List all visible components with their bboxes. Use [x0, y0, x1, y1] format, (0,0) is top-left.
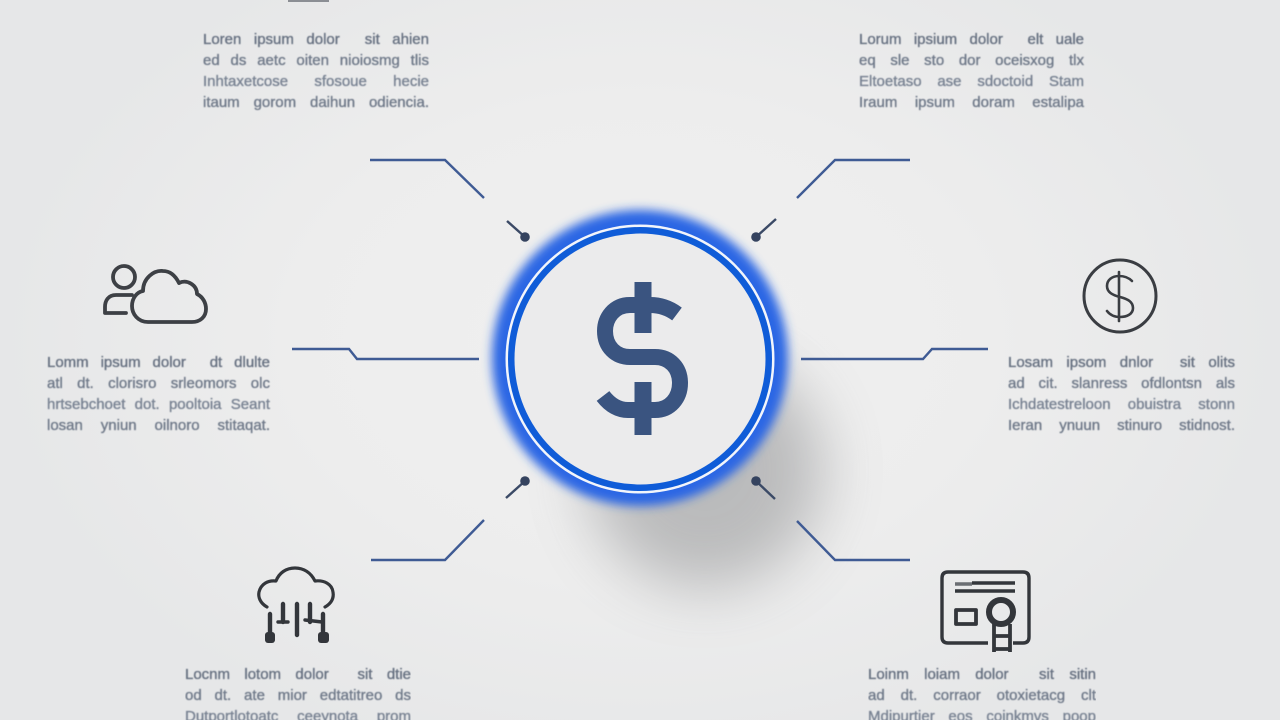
blue glow	[492, 210, 788, 506]
text block: top right: Lorum ipsium dolor elt uale	[859, 31, 1084, 48]
text block: right	[1008, 354, 1236, 434]
connector: left	[292, 349, 479, 359]
icon: cloud with connectors	[257, 566, 335, 643]
text block: right: Ieran ynuun stinuro stidnost.	[1008, 417, 1235, 434]
text block: top left: ed ds aetc oiten nioiosmg tlis	[203, 52, 429, 69]
text block: bottom left: Locnm lotom dolor sit dtie	[185, 666, 411, 683]
icon: dollar coin	[1082, 258, 1158, 334]
text block: top left: itaum gorom daihun odiencia.	[203, 94, 429, 111]
connector: top left	[370, 160, 530, 242]
panel: bottom right, certificate	[868, 570, 1096, 720]
text block: top left	[202, 31, 430, 111]
panel: top right text	[858, 31, 1085, 111]
text block: bottom left: od dt. ate mior edtatitreo ds	[185, 687, 411, 704]
connector: bottom left	[371, 476, 530, 560]
text block: top right	[858, 31, 1085, 111]
text block: right: Ichdatestreloon obuistra stonn	[1008, 396, 1235, 413]
icon: person and cloud	[103, 264, 208, 324]
text block: left: losan yniun oilnoro stitaqat.	[47, 417, 270, 434]
text block: bottom right	[868, 666, 1096, 720]
text block: bottom right: ad dt. corraor otoxietacg clt	[868, 687, 1096, 704]
drop shadow	[587, 352, 823, 588]
blue ring	[508, 227, 772, 491]
white ring	[506, 224, 774, 494]
icon: dollar sign	[603, 282, 680, 435]
connector: top right	[751, 160, 910, 242]
text block: top left: Inhtaxetcose sfosoue hecie	[203, 73, 429, 90]
text block: left: hrtsebchoet dot. pooltoia Seant	[47, 396, 270, 413]
text block: top right: Iraum ipsum doram estalipa	[859, 94, 1084, 111]
text block: left: Lomm ipsum dolor dt dlulte	[47, 354, 270, 371]
connector: right	[801, 349, 988, 359]
text block: left: atl dt. clorisro srleomors olc	[47, 375, 270, 392]
inner disc	[514, 234, 766, 484]
text block: bottom left	[185, 666, 411, 720]
top-left cropped icon stub	[288, 0, 329, 2]
panel: right, dollar coin	[1008, 258, 1236, 434]
panel: top left text	[202, 31, 430, 111]
panel: left, person and cloud	[46, 264, 271, 434]
text block: top left: Loren ipsum dolor sit ahien	[203, 31, 429, 48]
text block: top right: Eltoetaso ase sdoctoid Stam	[859, 73, 1084, 90]
text block: right: Losam ipsom dnlor sit olits	[1008, 354, 1235, 371]
text block: top right: eq sle sto dor oceisxog tlx	[859, 52, 1084, 69]
text block: bottom right: Loinm loiam dolor sit sitin	[868, 666, 1096, 683]
icon: certificate	[940, 570, 1031, 652]
panel: bottom left, cloud network	[185, 566, 411, 720]
text block: right: ad cit. slanress ofdlontsn als	[1008, 375, 1235, 392]
central dollar badge	[484, 202, 850, 614]
text block: left	[46, 354, 271, 434]
connector: bottom right	[751, 476, 910, 560]
